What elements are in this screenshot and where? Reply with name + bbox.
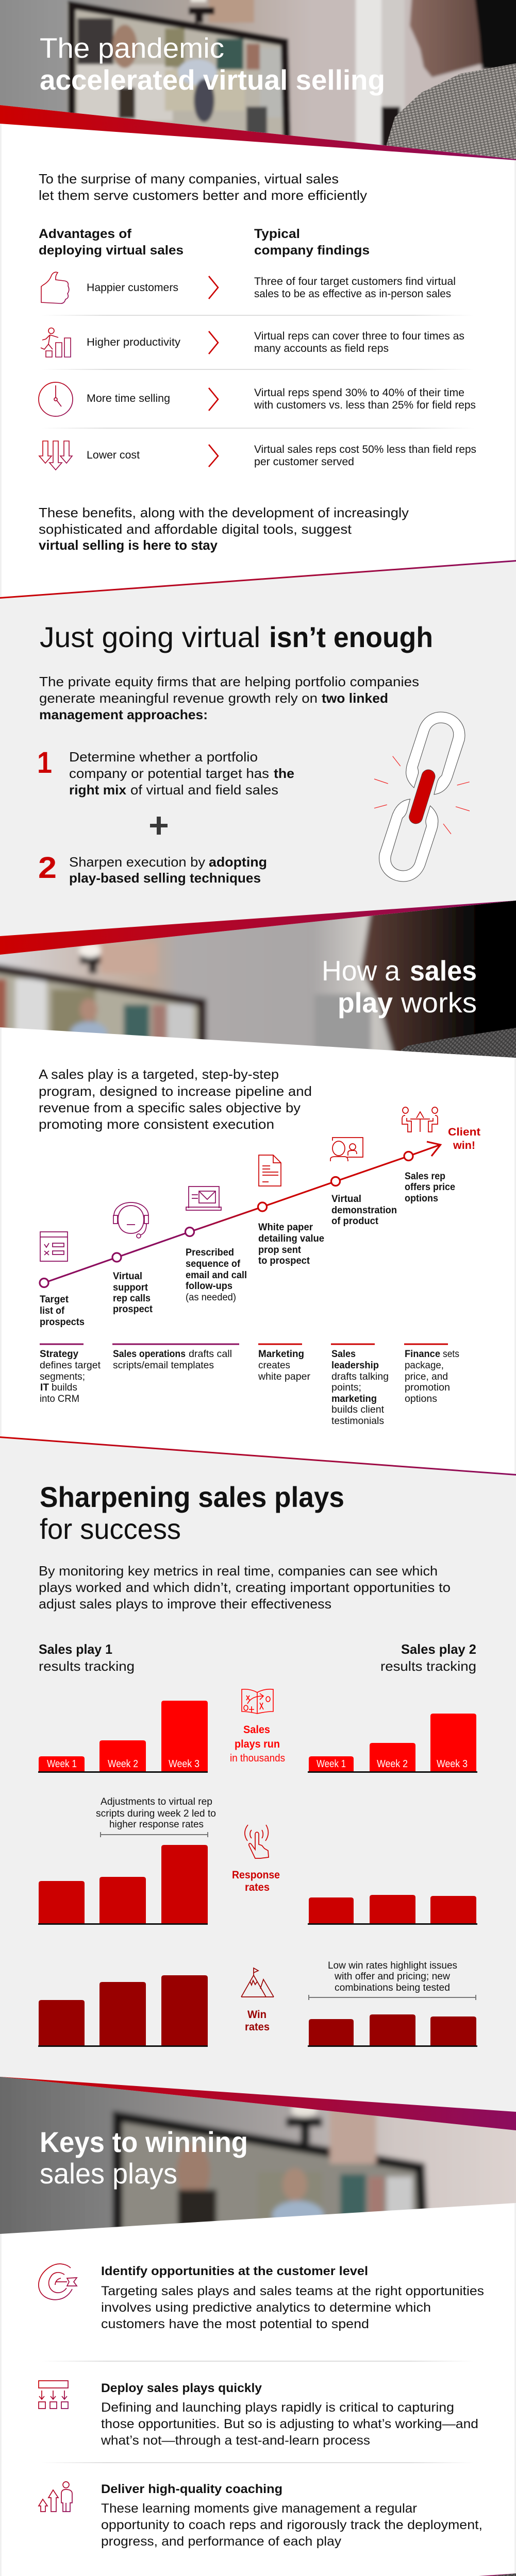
step 3 label: email and call [186,1270,247,1281]
finding text: Virtual reps can cover three to four times as [254,330,464,342]
heading: Just going virtual isn't enough [40,621,433,653]
role: sales leadership: drafts talking [331,1371,389,1382]
title: The pandemic accelerated virtual selling [40,32,385,96]
text block: sales play definition [39,1066,312,1132]
row: higher productivity: Higher productivity [87,336,181,348]
icon: clock [39,382,73,416]
label: response rates [232,1869,280,1893]
column heading: advantages [39,227,184,258]
finding text: Virtual reps spend 30% to 40% of their time [254,387,464,399]
body [101,2501,482,2549]
bar chart: response rates, play 2 [308,1895,477,1925]
body: those opportunities. But so is adjusting to what’s working—and [101,2417,478,2431]
step 6 label: Sales rep [405,1171,445,1182]
role: strategy: segments; [40,1371,85,1382]
icon: deploy [39,2381,68,2409]
title: Keys to winning sales plays: Keys to winning [40,2126,248,2158]
step 2 label: prospect [113,1304,153,1315]
label: sales plays run: Sales [243,1724,270,1736]
bar chart: sales plays run, play 1: Week 1 [47,1758,77,1770]
text block: closing benefits [39,505,409,553]
role: sales leadership: Sales [331,1349,356,1360]
label: sales plays run [230,1724,285,1764]
role: strategy: defines target [40,1360,101,1371]
step 3 label: Prescribed [186,1247,234,1258]
role: finance: Finance [405,1349,440,1360]
step 4 label: to prospect [258,1256,310,1266]
row: happier customers: Happier customers [87,282,178,294]
role: sales operations: Sales operations [113,1349,186,1360]
finding text [254,387,476,411]
number 2: 2 [38,851,57,885]
hero photo: monitor [0,2077,516,2234]
callout: adjustments: Adjustments to virtual rep [101,1796,212,1807]
body [101,2400,478,2448]
role: strategy [40,1349,101,1404]
icon: touch response [245,1825,269,1858]
icon: down arrows [39,441,72,470]
label: win rates: rates [245,2021,270,2033]
title: How a sales play works: How a [322,955,400,987]
bar chart: sales plays run, play 1: Week 3 [169,1758,199,1770]
chart heading: sales play 1 [39,1641,135,1674]
text block: approach 1: Determine whether a portfolio [69,749,258,765]
step 4 label: prop sent [258,1245,302,1256]
icon: playbook [242,1689,273,1714]
role: finance: price, and [405,1371,448,1382]
title: How a sales play works: works [401,987,477,1019]
label: win rates [245,2009,270,2033]
role: finance: sets [443,1349,459,1360]
label: response rates: Response [232,1869,280,1881]
callout: client win: win! [453,1140,475,1151]
body: Targeting sales plays and sales teams at the right opportunities [101,2284,484,2298]
column heading: findings: company findings [254,243,370,258]
key: deliver coaching [39,2482,482,2549]
heading: Deploy sales plays quickly [101,2381,262,2395]
finding text: Three of four target customers find virtual [254,276,456,287]
label: win rates: Win [247,2009,267,2021]
text block: approach 1: of virtual and field sales [130,782,278,798]
step 2 label: rep calls [113,1293,151,1304]
icon: coaching [39,2482,72,2512]
finding text [254,444,476,468]
text block: sales play definition: revenue from a specific sales objective by [39,1100,301,1115]
heading: Sharpening sales plays for success: for success [40,1513,181,1545]
text block: monitoring metrics: By monitoring key metrics in real time, companies can see which [39,1563,438,1579]
role owners [40,1344,459,1427]
hero photo: video call [0,0,516,175]
text block: monitoring metrics [39,1563,451,1612]
heading: Deliver high-quality coaching [101,2482,282,2496]
role: marketing [258,1349,311,1382]
step 3 label: sequence of [186,1259,241,1269]
chart heading: sales play 2 [380,1641,476,1674]
step 1 label: prospects [40,1317,85,1328]
text block: intro [39,171,367,203]
bar chart: sales plays run, play 2: Week 2 [377,1758,408,1770]
finding text [254,276,456,300]
panel: white sales play section [2,1025,514,1475]
role: sales operations: scripts/email templates [113,1360,214,1371]
icon: headset [113,1202,148,1238]
bar chart: win rates, play 1 [38,1975,208,2047]
hero photo: head and monitor [0,901,516,1058]
role: marketing: Marketing [258,1349,304,1360]
role: finance: package, [405,1360,444,1371]
body: involves using predictive analytics to determine which [101,2300,431,2315]
accent wedge: footer [0,2573,516,2576]
callout: adjustments: higher response rates [109,1819,204,1830]
icon: plus [150,817,168,835]
bar chart: sales plays run, play 2: Week 3 [437,1758,468,1770]
text block: approach 1: company or potential target has [69,766,269,781]
step labels [40,1171,455,1328]
bar chart: sales plays run, play 1 [38,1701,208,1773]
row: more time selling [39,382,476,416]
text block: monitoring metrics: plays worked and which didn’t, creating important opportunities to [39,1580,451,1595]
row: higher productivity [41,328,464,357]
title: Keys to winning sales plays: sales plays [40,2157,177,2190]
body: opportunity to coach reps and rigorously track the deployment, [101,2518,482,2532]
chart heading: sales play 2: results tracking [380,1658,476,1674]
callout: low win rates [309,1960,476,2000]
step 2 label: support [113,1282,148,1293]
chart: timeline line with nodes and arrow [40,1142,440,1287]
text block: sales play definition: program, designed to increase pipeline and [39,1083,312,1099]
text block: sales play definition: promoting more consistent execution [39,1116,274,1132]
arrow: chevron [209,388,218,411]
text block: approach 1 [69,749,294,798]
role: sales operations [113,1349,232,1371]
heading: Identify opportunities at the customer level [101,2264,368,2278]
text block: approach 2: adopting [209,854,267,870]
column heading: findings [254,227,370,258]
step 5 label: of product [331,1216,379,1227]
text block: two linked approaches: The private equity firms that are helping portfolio companies [39,674,419,689]
step 6 label [405,1171,455,1204]
chart heading: sales play 1: Sales play 1 [39,1641,112,1657]
title: How a sales play works: play [338,987,393,1019]
label: response rates: rates [245,1882,270,1893]
body: Defining and launching plays rapidly is critical to capturing [101,2400,454,2415]
column heading: advantages: Advantages of [39,227,132,241]
bar chart: sales plays run, play 2 [308,1714,477,1773]
role: strategy: builds [52,1382,77,1393]
body: These learning moments give management a regular [101,2501,417,2516]
row: lower cost [39,441,476,470]
role: marketing: white paper [258,1371,311,1382]
icon: people at table [402,1107,438,1132]
column heading: findings: Typical [254,227,300,241]
finding text: per customer served [254,456,354,468]
icon: climbing person and bars [41,328,71,357]
key: identify opportunities [39,2264,484,2331]
icon: checklist [40,1232,68,1261]
accent wedge: keys [0,2077,516,2130]
title: How a sales play works: sales [410,955,477,987]
title: The pandemic accelerated virtual selling: The pandemic [40,32,224,64]
step 5 label [331,1194,397,1227]
text block: intro: To the surprise of many companies, virtual sales [39,171,339,187]
role: sales leadership [331,1349,389,1427]
callout: low win rates: combinations being tested [335,1982,450,1993]
title: Keys to winning sales plays [40,2126,248,2190]
icon: mountain flag [241,1968,274,1997]
body: what’s not—through a test-and-learn process [101,2433,370,2448]
accent wedge: hero [0,105,516,160]
number 1: 1 [37,746,52,779]
title: The pandemic accelerated virtual selling: accelerated virtual selling [40,64,385,96]
arrow: chevron [209,331,218,354]
icon: thumbs up [41,272,69,303]
heading: Just going virtual isn't enough: Just going virtual [40,621,260,653]
step 6 label: options [405,1193,438,1204]
role: sales operations: drafts call [189,1349,232,1360]
role: finance: promotion [405,1382,450,1393]
body: customers have the most potential to spend [101,2317,369,2331]
role: sales leadership: builds client [331,1404,385,1415]
finding text: with customers vs. less than 25% for field reps [254,399,476,411]
callout: client win: Client [448,1126,480,1138]
bar chart: sales plays run, play 1: Week 2 [108,1758,138,1770]
icon: document [259,1155,281,1186]
heading: Sharpening sales plays for success [40,1481,344,1545]
bar chart: sales plays run, play 2: Week 1 [317,1758,346,1770]
step 6 label: offers price [405,1182,455,1193]
role: strategy: IT [40,1382,49,1393]
bar chart: response rates, play 1 [38,1845,208,1925]
chart heading: sales play 2: Sales play 2 [401,1641,476,1657]
text block: two linked approaches: two linked [322,690,388,706]
text block: two linked approaches: generate meaningful revenue growth rely on [39,690,318,706]
text block: approach 1: the [274,766,294,781]
role: sales leadership: points; [331,1382,361,1393]
heading: Just going virtual isn't enough: isn’t enough [269,621,433,653]
callout: low win rates: with offer and pricing; new [334,1971,451,1982]
row: more time selling: More time selling [87,393,170,404]
bar chart: win rates, play 2 [308,2014,477,2047]
step 1 label [40,1294,85,1328]
step 3 label: (as needed) [186,1292,236,1303]
heading: Sharpening sales plays for success: Sharpening sales plays [40,1481,344,1513]
accent wedge: sales play [0,901,516,955]
step 5 label: demonstration [331,1205,397,1216]
step 4 label: White paper [258,1222,313,1233]
finding text [254,330,464,354]
body [101,2284,484,2331]
role: sales leadership: leadership [331,1360,379,1371]
text block: two linked approaches [39,674,419,722]
role: finance: options [405,1394,437,1404]
chart heading: sales play 1: results tracking [39,1658,135,1674]
row: happier customers [41,272,456,303]
icon: virtual demonstration [330,1138,363,1161]
row: lower cost: Lower cost [87,449,140,461]
text block: intro: let them serve customers better and more efficiently [39,188,367,203]
step 2 label: Virtual [113,1271,142,1282]
text block: closing benefits: These benefits, along with the development of increasingly [39,505,409,520]
label: sales plays run: in thousands [230,1753,285,1764]
icon: target [39,2264,77,2300]
callout: adjustments: scripts during week 2 led to [96,1808,216,1819]
icon: email laptop [186,1187,221,1210]
role: finance [405,1349,459,1404]
arrow: chevron [209,276,218,299]
role: marketing: creates [258,1360,290,1371]
body: progress, and performance of each play [101,2534,342,2549]
arrow: chevron [209,445,218,467]
callout: adjustments [96,1796,216,1837]
role: strategy: into CRM [40,1394,79,1404]
footer photo [492,2573,516,2576]
step 2 label [113,1271,153,1315]
step 1 label: Target [40,1294,69,1305]
role: sales leadership: testimonials [331,1416,384,1427]
text block: approach 2 [69,854,267,886]
text block: closing benefits: sophisticated and affordable digital tools, suggest [39,521,352,537]
title: How a sales play works [322,955,477,1019]
text block: two linked approaches: management approaches: [39,707,208,722]
step 5 label: Virtual [331,1194,361,1205]
panel: white keys section [2,2200,514,2576]
text block: closing benefits: virtual selling is here to stay [39,537,218,553]
text block: approach 2: play-based selling techniques [69,870,261,886]
step 4 label: detailing value [258,1233,324,1244]
step 4 label [258,1222,324,1266]
role: strategy: Strategy [40,1349,78,1360]
finding text: Virtual sales reps cost 50% less than field reps [254,444,476,455]
key: deploy quickly [39,2381,478,2448]
panel: white advantages section [2,103,514,598]
step 3 label: follow-ups [186,1281,232,1292]
text block: sales play definition: A sales play is a targeted, step-by-step [39,1066,279,1082]
callout: client win [448,1126,480,1151]
icon: breaking chain [374,712,470,882]
text block: monitoring metrics: adjust sales plays to improve their effectiveness [39,1596,331,1612]
column heading: advantages: deploying virtual sales [39,243,184,258]
label: sales plays run: plays run [235,1738,280,1750]
finding text: many accounts as field reps [254,343,389,354]
text block: approach 2: Sharpen execution by [69,854,205,870]
callout: low win rates: Low win rates highlight issues [328,1960,457,1971]
text block: approach 1: right mix [69,782,127,798]
role: sales leadership: marketing [331,1394,377,1404]
step 1 label: list of [40,1306,65,1316]
step 3 label [186,1247,247,1303]
finding text: sales to be as effective as in-person sales [254,288,451,300]
